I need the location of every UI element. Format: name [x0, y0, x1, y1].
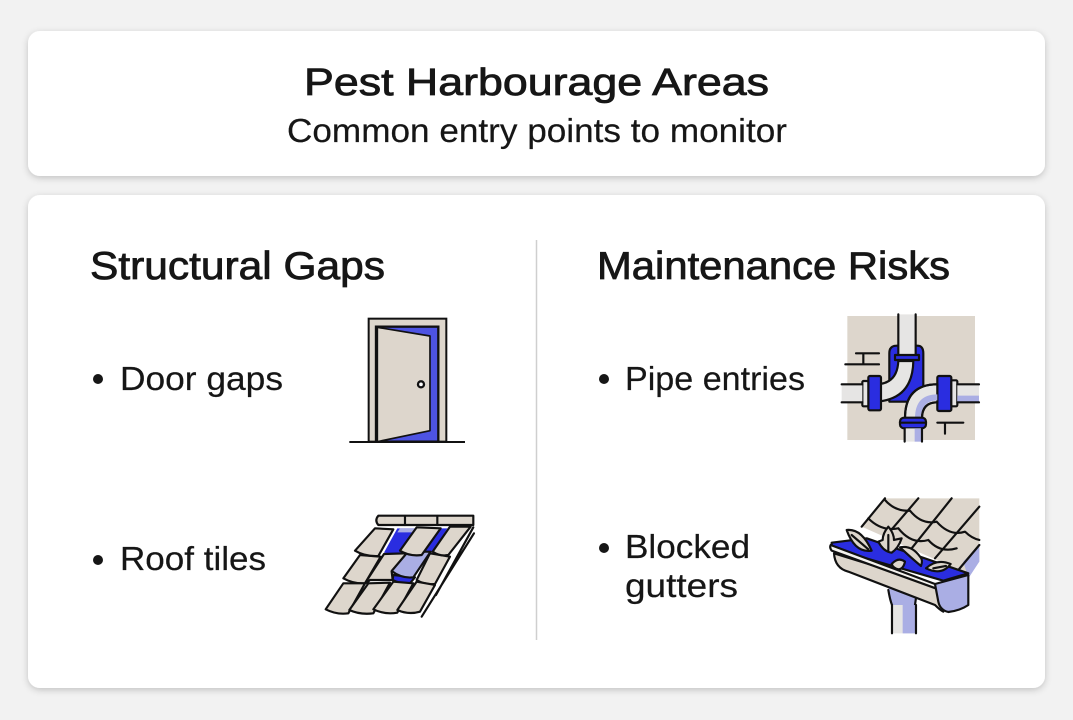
- list item: blocked gutters: Blocked: [625, 528, 750, 565]
- panel: main content: [28, 195, 1045, 688]
- list item: blocked gutters: [599, 528, 750, 604]
- subtitle: Common entry points to monitor: [287, 112, 787, 149]
- column: structural gaps: [90, 245, 474, 617]
- list item: pipe entries: Pipe entries: [625, 360, 805, 397]
- heading: maintenance risks: Maintenance Risks: [597, 245, 950, 288]
- icon: blocked gutter: [830, 498, 979, 633]
- icon: pipes: [842, 314, 979, 442]
- icon: door: [349, 319, 465, 442]
- list item: blocked gutters: gutters: [625, 567, 738, 604]
- column: maintenance risks: [597, 245, 979, 633]
- heading: structural gaps: Structural Gaps: [90, 245, 385, 288]
- panel: header: [28, 31, 1045, 176]
- list item: roof tiles: Roof tiles: [120, 540, 266, 577]
- icon: roof tiles: [326, 516, 474, 617]
- list item: door gaps: Door gaps: [120, 360, 283, 397]
- title: Pest Harbourage Areas: [304, 62, 769, 104]
